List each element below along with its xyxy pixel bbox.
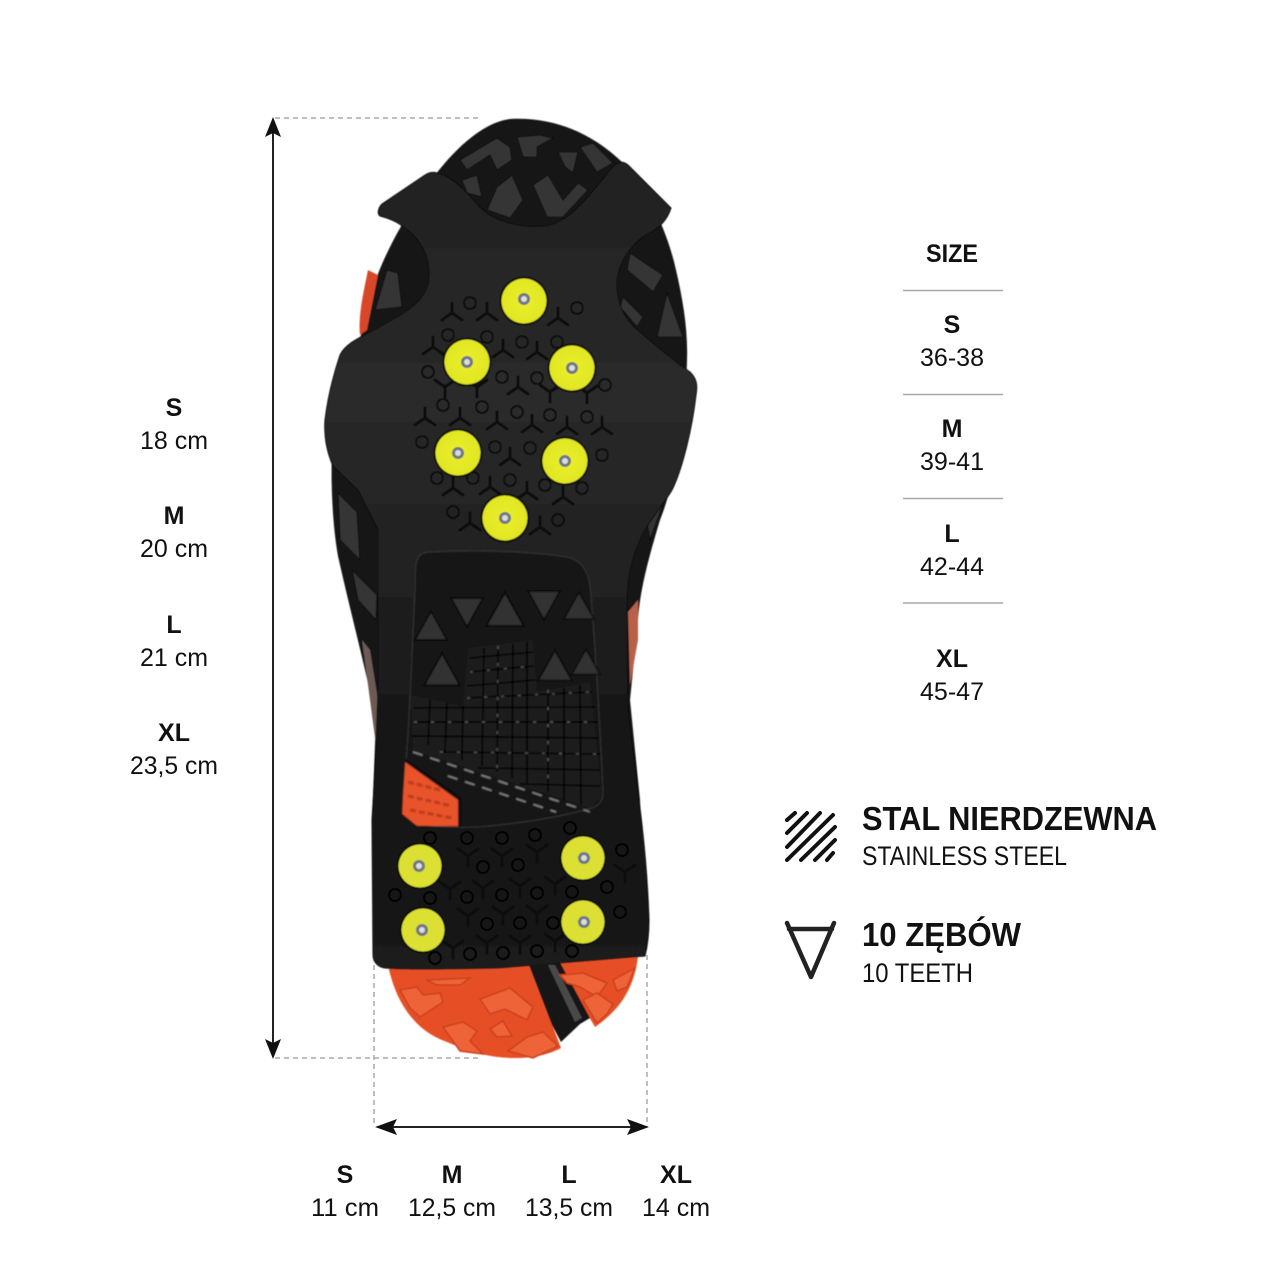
- label: stainless steel: STAINLESS STEEL: [862, 841, 1067, 871]
- shoe size table: S: [944, 311, 960, 339]
- width sizes list: M: [442, 1161, 462, 1189]
- icon: tooth triangle: [787, 923, 834, 977]
- shoe size table: 42-44: [920, 553, 984, 581]
- label: stainless steel: [862, 800, 1157, 871]
- length sizes list: 23,5 cm: [130, 752, 218, 780]
- shoe size table: XL: [936, 645, 968, 673]
- shoe size table: M: [942, 415, 962, 443]
- heel groove dark: [525, 955, 590, 1042]
- feature: 10 teeth: [787, 916, 1022, 988]
- heel rubber orange, main part: [386, 955, 561, 1058]
- feature: stainless steel: [787, 800, 1157, 871]
- label: 10 teeth: [862, 916, 1022, 988]
- length sizes list: L: [166, 611, 182, 639]
- width sizes list: XL: [660, 1161, 692, 1189]
- width sizes list: 11 cm: [311, 1194, 379, 1222]
- width sizes list: L: [561, 1161, 577, 1189]
- length sizes list: XL: [158, 719, 190, 747]
- heel tread lugs: [400, 968, 635, 1058]
- length sizes list: S: [166, 394, 182, 422]
- orange side stripes: [360, 270, 378, 335]
- width sizes list: 14 cm: [642, 1194, 710, 1222]
- icon: diagonal hatch: [787, 813, 835, 860]
- heel raised tread pattern: [389, 822, 635, 964]
- waffle grid tread: [411, 640, 602, 808]
- width dimension: dashed guides and arrow: [374, 955, 649, 1135]
- length sizes list: 20 cm: [140, 535, 208, 563]
- width sizes list: 13,5 cm: [525, 1194, 613, 1222]
- triangle lugs: [415, 591, 600, 685]
- shoe size table: 36-38: [920, 344, 984, 372]
- width sizes list: 12,5 cm: [408, 1194, 496, 1222]
- height dimension: dashed guides and arrow: [265, 117, 480, 1059]
- heel rubber orange, outer part: [552, 945, 639, 1027]
- heel studs: [396, 834, 606, 954]
- length sizes list: M: [164, 502, 184, 530]
- length sizes list: 21 cm: [140, 644, 208, 672]
- shoe size table: [903, 240, 1003, 706]
- length sizes list: 18 cm: [140, 427, 208, 455]
- illustration: shoe with ice cleat overshoe: [325, 119, 697, 1058]
- toe tread lugs: [338, 135, 683, 620]
- width sizes list: S: [337, 1161, 353, 1189]
- label: 10 teeth: 10 TEETH: [862, 958, 973, 988]
- shoe sole: [332, 119, 687, 1058]
- shoe size table: SIZE: [926, 240, 978, 268]
- midsole window: tread seen through: [402, 551, 603, 827]
- shoe size table: 39-41: [920, 448, 984, 476]
- length sizes list: [130, 394, 218, 780]
- label: 10 teeth: 10 ZĘBÓW: [862, 916, 1022, 953]
- shoe size table: L: [944, 520, 960, 548]
- width sizes list: [311, 1161, 710, 1222]
- heel section of overshoe shading: [372, 790, 647, 969]
- overshoe rubber cover: [325, 162, 697, 969]
- shoe size table: 45-47: [920, 678, 984, 706]
- label: stainless steel: STAL NIERDZEWNA: [862, 800, 1157, 837]
- forefoot raised tread pattern: [415, 297, 612, 534]
- forefoot studs: [434, 276, 596, 542]
